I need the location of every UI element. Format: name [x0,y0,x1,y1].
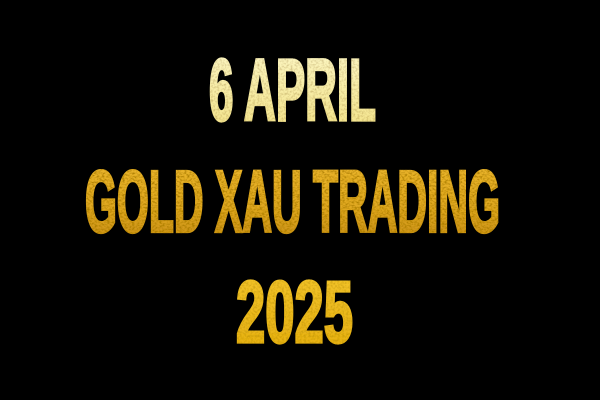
heading line: year: 2025 [236,264,353,361]
heading line: date: 6 APRIL [209,42,376,139]
